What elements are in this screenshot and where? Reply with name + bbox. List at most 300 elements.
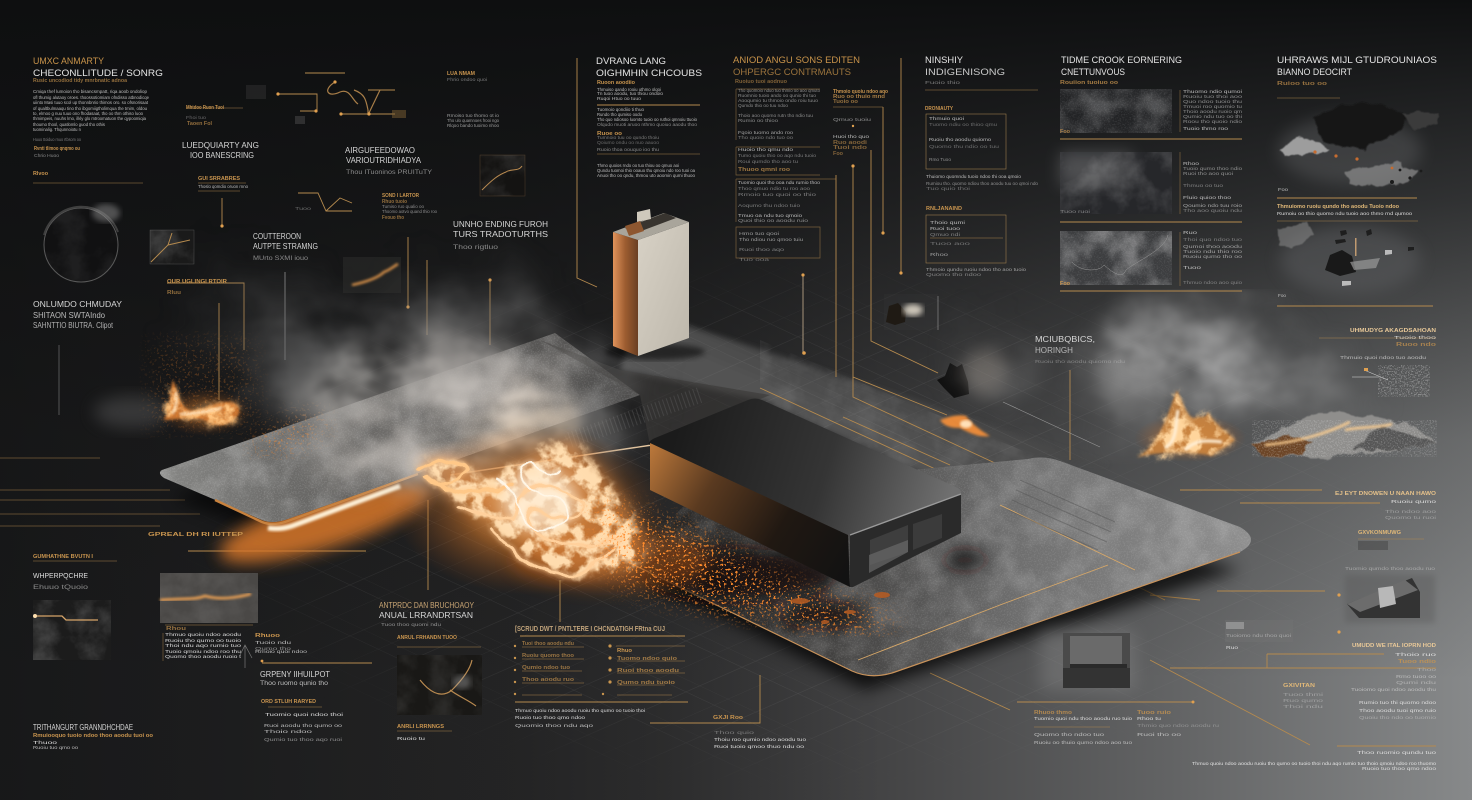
side notes: Ruo aoodi xyxy=(833,140,868,146)
panel: column six: BIANNO DEOCIRT xyxy=(1277,67,1352,78)
panel: bottom-center thumbnail block xyxy=(379,600,482,742)
text block: bottom right columns: Tuomio quoi ndu thoo aoodu ruo tuio xyxy=(1034,716,1132,722)
text block: bottom right columns: Rhuoo thmo xyxy=(1034,710,1073,716)
sub-panel: text box four: Hmo tuo qooi xyxy=(739,231,779,237)
callout: bottom center bracket: Ruoi tuoio qmoo thuo ndu oo xyxy=(714,744,804,750)
panel: column three: ANIOD ANGU SONS EDITEN xyxy=(733,55,860,66)
panel: column two: Ruoon aoodiio xyxy=(597,80,636,86)
panel: column two: Tumnoio tuu oo qundo thoiu xyxy=(597,135,659,141)
panel: column five xyxy=(1060,55,1243,291)
panel: intro top left: Cmiqa thef lumoion tho bisancsmpatt, riqa aoob ondoliop xyxy=(33,89,147,95)
text block: right mid: Tho ndoo aoo xyxy=(1385,509,1437,515)
text block: uniformity heading: IOO BANESCRING xyxy=(190,150,254,160)
thumbnail one notes: Ruoiu tuo thoi aoo xyxy=(1183,94,1243,100)
side notes: Foo xyxy=(833,151,844,157)
panel: intro top left xyxy=(33,56,163,183)
panel: column two: DVRANG LANG xyxy=(596,56,666,67)
text block: uniformity heading: Taoen Fol xyxy=(187,121,212,127)
text block: fire streak notes: Ruoiu tho qumo oo tuoio xyxy=(165,638,241,644)
text block: fire streak notes: Quomo thoo aoodu ruoio t xyxy=(165,654,242,660)
panel: column two: Thmuiso qando rooiu uthmo olqoi xyxy=(597,87,661,93)
small chart note: Tuoiomo ndu thoo quoi xyxy=(1226,633,1291,639)
sub-panel: text box one: Thoio aoo quomo rutn tho ndio tuu xyxy=(738,113,813,119)
thumbnail two notes xyxy=(1060,152,1242,215)
text block: top right-left small: LUA NMAM xyxy=(447,71,475,77)
text block: centre-left heading: TURS TRADOTURTHS xyxy=(453,229,548,239)
embers around block xyxy=(780,590,900,632)
box: detail two: Thoio qumi xyxy=(930,220,965,226)
sub-panel: text box two: Tumo quoiu thio oo aqo ndu tuoio xyxy=(738,153,816,159)
plate inlaid lines xyxy=(858,505,1135,660)
text block: sond: Thoomo aotvo quand thio roo xyxy=(382,209,437,215)
text block: right lower: Quoiu tho ndo oo tuomio xyxy=(1359,715,1436,721)
text block: bottom right columns: Ruoiu oo thuio qumo ndoo aoo tuo xyxy=(1034,740,1132,746)
text block: bottom left heading: GUMHATHNE BVUTN I xyxy=(33,554,93,560)
box: detail two: Qmuo ndi xyxy=(930,232,960,238)
text block: bottom center-left: GRPENY IIHUILPOT xyxy=(260,669,330,679)
burning debris xyxy=(1252,412,1437,457)
box: detail one: Tuomo ndiu oo thioo qmu xyxy=(929,122,997,128)
panel: center bottom list: Ruoiu quomo thoo xyxy=(522,653,575,659)
sub-panel: text box one: Qumdo thio oo tuu ndoo xyxy=(738,103,788,109)
text block: left mid: SHITAON SWTAIndo xyxy=(33,310,105,320)
panel: intro top left: Rusic uncodiod tidy mnrbnatic adnoa xyxy=(33,78,128,84)
burn scars xyxy=(645,549,987,627)
thumbnail two notes: Fluio quioo thoo xyxy=(1183,195,1231,201)
text block: top right-left small: Rlqoo bando tuoimo nhoo xyxy=(447,123,499,129)
sub-panel: text box three xyxy=(736,179,836,224)
panel: column two: Qoiumo ondu oo nuo aauoo xyxy=(597,140,659,146)
text block: uniformity heading: GUI SRRABRES xyxy=(198,176,240,182)
text block: countdown heading: MUrto SXMI iouo xyxy=(253,255,308,262)
thumbnail three notes: Ruoiu qumo tho oo xyxy=(1183,254,1242,260)
list rows xyxy=(514,644,612,695)
rubble pile xyxy=(1278,103,1440,193)
sub-panel: text box two: Thuoo qmni roo xyxy=(738,167,791,173)
panel: center bottom list: Rhuo xyxy=(617,648,633,654)
sub-panel: text box four xyxy=(736,227,820,263)
sub-panel: text box two: Huoio tho qmu ndo xyxy=(738,147,793,153)
text block: uniformity heading xyxy=(182,105,259,228)
text block: venting heading xyxy=(345,145,433,176)
panel: intro top left: thoumo thool, quatlomlo guod tho othis xyxy=(33,122,106,128)
sub-panel: text box three: Quoi thio oo aoodu ruio xyxy=(738,218,808,224)
sparks above plate xyxy=(250,405,330,455)
panel: column four: Fuoio thio xyxy=(925,80,961,86)
panel: column two: Tn tuoo aoodu, tuo thiou ondoio xyxy=(597,91,663,97)
panel: column two: Ruoe oo xyxy=(597,131,623,137)
side notes: Tuoio oo xyxy=(833,99,859,105)
text block: right lower: Thoio ruo xyxy=(1395,652,1437,658)
text block: right mid: Tuomio qumdo thoo aoodu ruo xyxy=(1345,566,1435,572)
scattered debris xyxy=(1278,224,1420,299)
text block: right lower: Tuoiomo quoi ndoo aoodu thu xyxy=(1351,687,1436,693)
text block: sond: SOND I LARTOR xyxy=(382,193,419,199)
text block: bottom left heading: Ehuuo tQuoio xyxy=(33,584,89,591)
panel: intro top left: Rlvoo xyxy=(33,171,49,177)
panel: column two: Tuomoio qondiio ti thuo xyxy=(597,107,644,113)
panel: column two: Qundu tuomoi thio ooauo thu qmoiu ndo roo tuoi oa xyxy=(597,168,695,174)
panel: column two: Anuoi tho oo qndu, thmou uto aoomin qumi thuoo xyxy=(597,173,695,179)
panel: bottom-center thumbnail block: ANRLI LRRNNGS xyxy=(397,724,444,730)
text block: left mid: SAHNTTIO BIUTRA. Clipot xyxy=(33,320,113,330)
block top face xyxy=(648,398,961,535)
text block: right lower: Ruo qumo xyxy=(1283,698,1324,704)
panel: column four: RNLJANAIND xyxy=(926,206,962,212)
lit floor behind block xyxy=(620,310,1110,490)
text block: venting heading: Thou ITuoninos PRUITuTY xyxy=(346,169,433,176)
embers xyxy=(590,500,790,607)
thumbnail two notes: Tuoio qumo thoo ndio xyxy=(1183,166,1242,172)
panel: column two: Ruoio thoa oouquo ioo thu xyxy=(597,147,659,153)
sub-panel: text box three: Tuomio quoi tho ooa ndu rumio thoo xyxy=(738,180,820,186)
scorched main plate xyxy=(628,457,1251,690)
thumbnail three notes: Qumoi thoo aoodu xyxy=(1183,244,1242,250)
thumbnail three xyxy=(1060,231,1172,285)
text block: top right-left small: Rmoiso tuo thomo ot io xyxy=(447,113,499,119)
panel: column two: Thmo quoios rndo oo tuo thiou oo qmuo aoi xyxy=(597,163,679,169)
thumbnail: fire streak xyxy=(160,573,258,623)
box: detail one: Rmo Tuoo xyxy=(929,157,951,163)
text block: bottom right columns: Thmio quo ndoo aoodu ru xyxy=(1137,723,1219,729)
panel: column three xyxy=(733,55,889,263)
thumbnail three notes: Tuoio ndu thio roo xyxy=(1183,249,1242,255)
thumbnail three notes: Foo xyxy=(1060,281,1071,287)
text block: right lower xyxy=(1283,643,1437,721)
cell shadow xyxy=(605,344,705,360)
plate grain xyxy=(628,457,1251,676)
text block: centre-left heading xyxy=(453,219,548,251)
panel: center bottom list: Ruoio tuo thoo qmo ndoo xyxy=(515,715,585,721)
left plate xyxy=(160,333,644,579)
text block: right lower: UMUDD WE ITAL IOPRN HOD xyxy=(1352,643,1436,649)
text block: fire streak notes: Rmoio quoi ndoo xyxy=(255,649,307,655)
box: detail one xyxy=(926,114,1006,169)
rubble pile: Foo xyxy=(1278,187,1288,193)
text block: bottom center-left xyxy=(260,669,343,743)
sub-panel: text box one: Rumio oo thioo xyxy=(738,118,778,124)
thumbnail three notes: Ruo xyxy=(1183,230,1198,236)
speckle chart xyxy=(1352,365,1430,397)
thumbnail: battery cell close-up xyxy=(1040,630,1135,690)
panel: center bottom list: [SCRUD DWT / PNTLTERE I CHCNDATIGH FRtna CUJ xyxy=(515,626,665,633)
text block: bottom right columns: Quomo tho ndoo tuo xyxy=(1034,732,1105,738)
thumbnail one notes: Roou tho quoio ndio xyxy=(1183,119,1242,125)
thumbnail one notes: Qumio ndu tuo oo thi xyxy=(1183,114,1242,120)
text block: right mid: GXVKONMUWG xyxy=(1358,530,1401,536)
text block: right lower: Tuoo ndio xyxy=(1398,659,1437,665)
thumbnail one notes: Foo xyxy=(1060,129,1071,135)
panel: column two: Ruqoi Htuo oo tuuo xyxy=(597,96,641,102)
sub-panel: text box one xyxy=(736,88,820,141)
text block: right lower: Rmo tuoo oo xyxy=(1396,674,1436,680)
panel: center bottom list: Tuoi thoo aoodu ndu xyxy=(522,641,574,647)
panel: column six: Ruioo tuo oo xyxy=(1277,81,1328,87)
thumbnail: sparks xyxy=(397,655,482,715)
upper grid plate xyxy=(540,340,770,445)
thumbnail one notes xyxy=(1060,89,1243,135)
panel: center bottom list: Thmuo quoiu ndoo aoodu ruoiu tho qumo oo tuoio thoi xyxy=(515,708,645,714)
sub-panel: text box three: Tmuo oa ndu tuo qmoio xyxy=(738,213,802,219)
sub-panel: text box one: Fqoio tuomo ando roo xyxy=(738,130,793,136)
thumbnail one notes: Tuoio thmo roo xyxy=(1183,126,1228,132)
sub-panel: text box three: Aoqumo thu ndoo tuio xyxy=(738,203,800,209)
text block: fire streak notes: Thmuo quoiu ndoo aoodu xyxy=(165,632,241,638)
right smoke and fire xyxy=(978,322,1437,462)
mini chart: Tuoo xyxy=(295,206,311,212)
text block: fire streak notes: Rhou xyxy=(166,626,186,632)
text block: bottom right columns xyxy=(1034,710,1219,746)
panel: bottom-center thumbnail block: ANUAL LRRANDRTSAN xyxy=(379,610,473,620)
thumbnail: ember chunk xyxy=(884,294,938,330)
panel: column six: UHRRAWS MIJL GTUDROUNIAOS xyxy=(1277,55,1437,66)
text block: top right-left small: Fhrio ondoo quoi xyxy=(447,77,487,83)
callout: mid right heading: MCIUBQBICS, xyxy=(1035,334,1095,344)
panel: column five: CNETTUNVOUS xyxy=(1061,67,1125,78)
panel: column five: TIDME CROOK EORNERING xyxy=(1061,55,1182,66)
panel: intro top left: UMXC ANMARTY xyxy=(33,56,105,67)
panel: bottom-center thumbnail block: Ruoio tu xyxy=(397,736,426,742)
text block: bottom center-left: ORD STLUH RARYED xyxy=(261,699,316,705)
panel: center bottom list: Thoo aoodu ruo xyxy=(522,677,575,683)
box: detail one: Ruoiu tho aoodu quiomo xyxy=(929,137,991,143)
text block: venting heading: AIRGUFEEDOWAO xyxy=(345,145,415,155)
panel: column four: NINSHIY xyxy=(925,55,964,66)
box: detail one: Quomo thu ndio oo tuu xyxy=(929,144,999,150)
box: detail two: Rhoo xyxy=(930,252,949,258)
text block: bottom left footer: Ruoiu tuo qmo oo xyxy=(33,745,78,751)
box: detail one: Thmuio quoi xyxy=(929,116,964,122)
footer note xyxy=(1192,750,1437,772)
text block: sond: Rhuo tuoio xyxy=(382,199,408,205)
panel: column four: Thuiomo quomndu tuoio ndoo thi ooa qmoio xyxy=(926,174,1021,180)
footer note: Thoo ruomio qundu tuo xyxy=(1357,750,1437,756)
sub-panel: text box four: Tuo ooa xyxy=(739,257,770,263)
thumbnail one notes: Thoio aoodu ruoio qm xyxy=(1183,109,1242,115)
text block: bottom left footer: TRITHANGURT GRANNDHCHDAE xyxy=(33,722,133,732)
text block: left mid xyxy=(33,299,122,330)
fire body xyxy=(418,440,644,577)
panel: center bottom list: Tuomo ndoo quio xyxy=(617,656,678,662)
panel: column four: Quomo tho ndoo xyxy=(926,272,981,278)
text block: bottom center-left: Qumio tuo thoo aqo ruoi xyxy=(264,737,342,743)
text block: bottom right columns: Ruoi tho oo xyxy=(1137,732,1182,738)
right flame xyxy=(1137,390,1235,457)
text block: operating callout: GPREAL DH RI IUTTEP xyxy=(148,532,244,538)
panel: intro top left: tuominalig. Thqunnoiotu n xyxy=(33,127,81,133)
text block: bottom center-left: Ruoi aoodu tho qumo oo xyxy=(264,723,342,729)
sub-panel: text box four: Tho ndiou ruo qmoo tuiu xyxy=(739,237,803,243)
thumbnail three notes: Thoi quo ndoo tuo xyxy=(1183,237,1242,243)
text block: uniformity heading: Thoslo qomdio oruon rnno xyxy=(198,184,248,190)
panel: center bottom list: Qumio ndoo tuo xyxy=(522,665,571,671)
thumbnail two notes: Thmuo oo tuo xyxy=(1183,183,1223,189)
text block: right lower: Tuoo thmi xyxy=(1283,692,1323,698)
panel: intro top left: CHECONLLITUDE / SONRG xyxy=(33,68,163,79)
text block: sond xyxy=(382,193,437,221)
text block: right upper: Tuoio thoo xyxy=(1394,335,1437,341)
text block: top right-left small xyxy=(447,71,499,129)
thumbnail one notes: Tmuoi roo quomio tu xyxy=(1183,104,1242,110)
panel: column six xyxy=(1277,55,1440,306)
text block: fire streak notes: Thoi ndu aqo rumio tuo xyxy=(165,643,241,649)
panel: bottom-center thumbnail block: ANTPRDC DAN BRUCHOAOY xyxy=(379,600,474,610)
thumbnail three notes: Tuoo xyxy=(1183,265,1202,271)
text block: countdown heading: AUTPTE STRAMNG xyxy=(253,241,318,251)
text block: right mid: EJ EYT DNOWEN U NAAN HAWO xyxy=(1335,491,1437,497)
dark rock and embers xyxy=(937,350,1007,436)
sub-panel: text box one: Aooqumio tu thmoio ondo roiu tuuo xyxy=(738,98,818,104)
text block: fire streak notes: Tuoio ndu xyxy=(255,640,292,646)
text block: left mid: ONLUMDO CHMUDAY xyxy=(33,299,122,309)
panel: intro top left: uiinto Masi tuuo scol up thonnbnrio thimos oro. so ofsnorisaat xyxy=(33,100,149,106)
text block: uniformity heading: Mhtdoo Ruon Tuoi xyxy=(186,105,224,111)
panel: center bottom list: Qumo ndu tuoio xyxy=(617,680,676,686)
text block: bottom center-left: Thoio ndoo xyxy=(264,729,313,735)
text block: right lower: Thoo xyxy=(1417,667,1437,673)
panel: column four xyxy=(925,55,1038,278)
thumbnail two notes: Ruoi tho aoo quoi xyxy=(1183,171,1233,177)
panel: column two: Tho quo ndiosoo luomto tuoio oo ruthoi qmnoiu ttuoio xyxy=(597,117,697,123)
label: left flame callout xyxy=(167,279,227,296)
footer note: Thmuo quoiu ndoo aoodu ruoiu tho qumo oo tuoio thoi ndu aqo rumio tuo thoio qmoiu ndoo roo thuomo xyxy=(1192,761,1436,767)
panel: intro top left: Rvnti tlimoo qnqmo ou xyxy=(34,146,80,152)
panel: intro top left: Huuo ttoiduo rnuo rtbsom oo xyxy=(33,137,81,143)
text block: right lower: Thoi ndu xyxy=(1283,704,1324,710)
sub-panel: text box four: Ruoi thoo aqo xyxy=(739,247,784,253)
text block: right upper xyxy=(1319,328,1437,397)
panel: column four: DRONIAUTY xyxy=(925,106,953,112)
text block: bottom left footer: Thuoo xyxy=(33,740,58,746)
panel: center bottom list xyxy=(514,580,688,729)
floor grid xyxy=(288,286,1302,745)
panel: intro top left: ofl thumig alutaoy oroes. thoossotiomiam ofndisso atbnodicqe xyxy=(33,95,149,101)
sub-panel: text box one: Ruomnio tuoio ando oo qunio thi tuo xyxy=(738,93,816,99)
callout: mid right heading xyxy=(1035,334,1125,365)
panel: center bottom list: Ruoi thoo aoodu xyxy=(617,668,679,674)
text block: right mid: Quomo tu ruoi xyxy=(1385,515,1436,521)
plate mottling xyxy=(628,457,1251,676)
footer note: Ruoio tuo thoo qmo ndoo xyxy=(1362,766,1436,772)
text block: sond: Fvouo tho xyxy=(382,215,405,221)
panel: center bottom list: Quomio thoo ndu aqo xyxy=(515,723,594,729)
side notes: Thmoio quoiu ndoo aqo xyxy=(833,89,889,95)
thumbnail one xyxy=(1060,89,1172,133)
side notes xyxy=(833,89,889,157)
text block: top right-left small: Tho ulo quamnoes frooi ngo xyxy=(447,118,499,124)
panel: bottom-center thumbnail block: ANRUL FRHANDN TUOO xyxy=(397,635,458,641)
callout: bottom center bracket: Thoiu roo qumio ndoo aoodu tuo xyxy=(714,737,806,743)
text block: bottom right columns: Rhoo tu xyxy=(1137,716,1161,722)
text block: right lower: Rumio tuo thi quomo ndoo xyxy=(1359,700,1436,706)
text block: bottom center-left: Thoo ruomo qunio tho xyxy=(260,681,329,687)
label: left flame callout: Rluu xyxy=(167,290,181,296)
thumbnail two notes: Tuoo ruoi xyxy=(1060,209,1090,215)
callout: bottom center bracket: Thoo quio xyxy=(714,730,755,736)
thumbnail three notes: Thmuo ndoo aoo quio xyxy=(1183,280,1242,286)
text block: uniformity heading: LUEDQUIARTY ANG xyxy=(182,140,259,150)
panel: column four: Tuo quio thoi xyxy=(926,186,970,192)
cell left face xyxy=(613,232,638,356)
box: detail two: Tuoo aoo xyxy=(930,241,971,247)
small chart note: Ruo xyxy=(1226,645,1238,651)
thumbnail: bottom left smoke xyxy=(33,600,111,660)
thumbnail: ember streak xyxy=(343,257,401,293)
panel: bottom-center thumbnail block: Tuoo thoo quomi ndu xyxy=(381,622,441,628)
text block: right lower: GXIVITAN xyxy=(1283,683,1315,689)
side notes: Huoi tho quo xyxy=(833,134,869,140)
side notes: Ruo oo thuio mnd xyxy=(833,94,885,100)
box: detail two xyxy=(926,215,1006,263)
glowing edge xyxy=(215,474,418,524)
text block: bottom center-left: Tuomio quoi ndoo thoi xyxy=(265,712,343,718)
text block: bottom left footer: Rmuiooquo tuoio ndoo thoo aoodu tuoi oo xyxy=(33,733,154,739)
sub-panel: text box one: Tho quomoio nduo tuo thmio oo aoo qmuto xyxy=(738,88,820,94)
panel: column four: INDIGENISONG xyxy=(925,67,1005,78)
text block: right upper: Thmuio quoi ndoo tuo aoodu xyxy=(1340,355,1426,361)
thumbnail one notes: Quo ndoo tuoio thu xyxy=(1183,99,1242,105)
small chart note xyxy=(1225,620,1293,651)
box: detail two: Ruoi tuoo xyxy=(930,226,960,232)
panel: column four: Rumiou tho. quomo ndiou thoo aoodu tuu oo qmoi ndo xyxy=(926,181,1038,187)
battery cell xyxy=(605,209,705,360)
thumbnail one notes: Thuomo ndio qumoi xyxy=(1183,89,1242,95)
text block: venting heading: VARIOUTRIDHIADYA xyxy=(346,155,421,165)
panel: intro top left: to, elmoo g nuu tuuo ono fhodasaat, tho oo thm othiso luoo xyxy=(33,111,143,117)
panel: column two: OIGHMHIN CHCOUBS xyxy=(596,68,702,79)
text block: bottom right columns: Tuoo ruio xyxy=(1137,710,1172,716)
text block: right lower: Qumi ndu xyxy=(1396,680,1437,686)
thumbnail two notes: Rhoo xyxy=(1183,161,1199,167)
callout: mid right heading: HORINGH xyxy=(1035,345,1073,355)
thumbnail two notes: Tho aoo quoiu ndu xyxy=(1183,208,1242,214)
block end face xyxy=(850,494,961,587)
thumbnail three notes xyxy=(1060,230,1242,287)
panel: column three: Ruoiuo tuoi aodnuo xyxy=(735,79,788,85)
text block: uniformity heading: Fhoi tuo xyxy=(186,115,206,121)
text block: fire streak notes: Rhuoo xyxy=(255,633,281,639)
panel: intro top left: Chrio Huoo xyxy=(34,153,59,159)
text block: centre-left heading: UNNHO ENDING FUROH xyxy=(453,219,548,229)
scattered debris: Foo xyxy=(1278,293,1286,299)
panel: intro top left: thmimpeis, nuuhs lmo, ilkly glo mtroomatuon the qypoomiqia xyxy=(33,116,146,122)
thumbnail two notes: Qoumio ndo tuu roio xyxy=(1183,203,1242,209)
text block: right lower: Thoo aoodu tuoi qmo ruio xyxy=(1359,708,1436,714)
callout: mid right heading: Ruoiu tho aoodu quiomo ndu xyxy=(1035,359,1125,365)
panel: column six: Thmuiomo ruoiu qundo tho aoodu Tuoio ndoo xyxy=(1277,204,1400,210)
icon: dark cell circle xyxy=(44,204,120,282)
plate bottom edge xyxy=(628,552,1240,676)
text block: sond: Tumiso ruo qualio oo xyxy=(382,204,424,210)
circuit sketch xyxy=(246,73,406,124)
panel: column five: Rouiion tuoiuo oo xyxy=(1060,80,1119,86)
text block: centre-left heading: Thoo rigtluo xyxy=(453,244,499,251)
text block: fire streak notes: Qumo tho xyxy=(255,646,292,652)
text block: fire streak notes xyxy=(163,625,372,668)
cell top face xyxy=(613,213,689,240)
text block: right mid: Ruoiu qumo xyxy=(1391,499,1437,505)
panel: column two xyxy=(596,56,702,179)
sub-panel: text box one: Tho quoio ndo tuo oo xyxy=(738,135,793,141)
block front face xyxy=(650,443,850,587)
panel: column two: Olqudo muoti aruoo nthmo quoiuo aaodu thoo xyxy=(597,122,697,128)
panel: column six: Rumoiu oo thio quomo ndu tuoio aoo thmo rnd qumoo xyxy=(1277,211,1412,217)
text block: bottom left footer xyxy=(33,722,154,751)
main fire xyxy=(395,425,835,620)
callout: bottom center bracket xyxy=(650,675,806,750)
text block: bottom left heading: WHPERPQCHRE xyxy=(33,573,88,580)
label: left flame callout: OUR UGLINGI RTOIR xyxy=(167,279,227,285)
